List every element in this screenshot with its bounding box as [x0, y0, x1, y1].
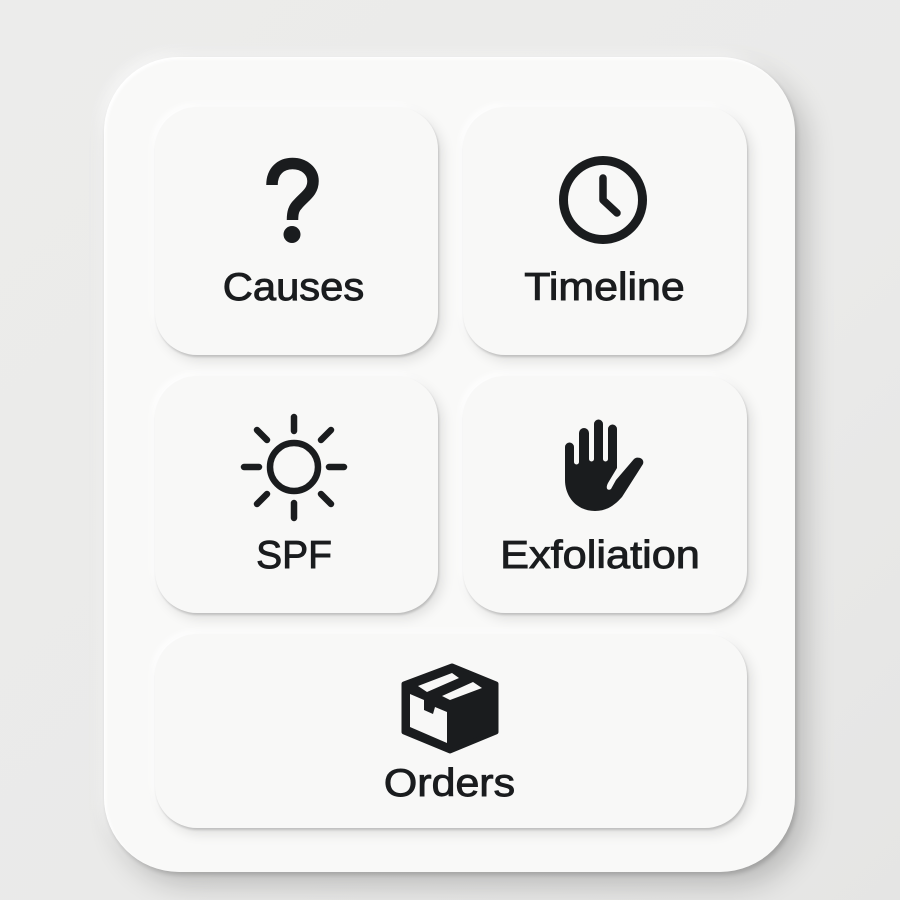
icon: hand — [565, 420, 644, 511]
label: Exfoliation: Exfoliation — [500, 534, 700, 577]
card: orders — [155, 634, 747, 828]
card: causes — [155, 107, 438, 355]
icon: question mark — [266, 158, 319, 243]
label: SPF: SPF — [256, 534, 332, 577]
card: timeline — [463, 107, 747, 355]
card: spf — [155, 376, 438, 613]
icon: clock — [559, 156, 647, 244]
panel: base plate — [104, 57, 795, 872]
icon: box — [402, 664, 498, 754]
label: Orders: Orders — [384, 762, 515, 805]
card: exfoliation — [463, 376, 747, 613]
label: Causes: Causes — [223, 266, 364, 309]
label: Timeline: Timeline — [524, 266, 685, 309]
icon: sun — [240, 414, 348, 522]
